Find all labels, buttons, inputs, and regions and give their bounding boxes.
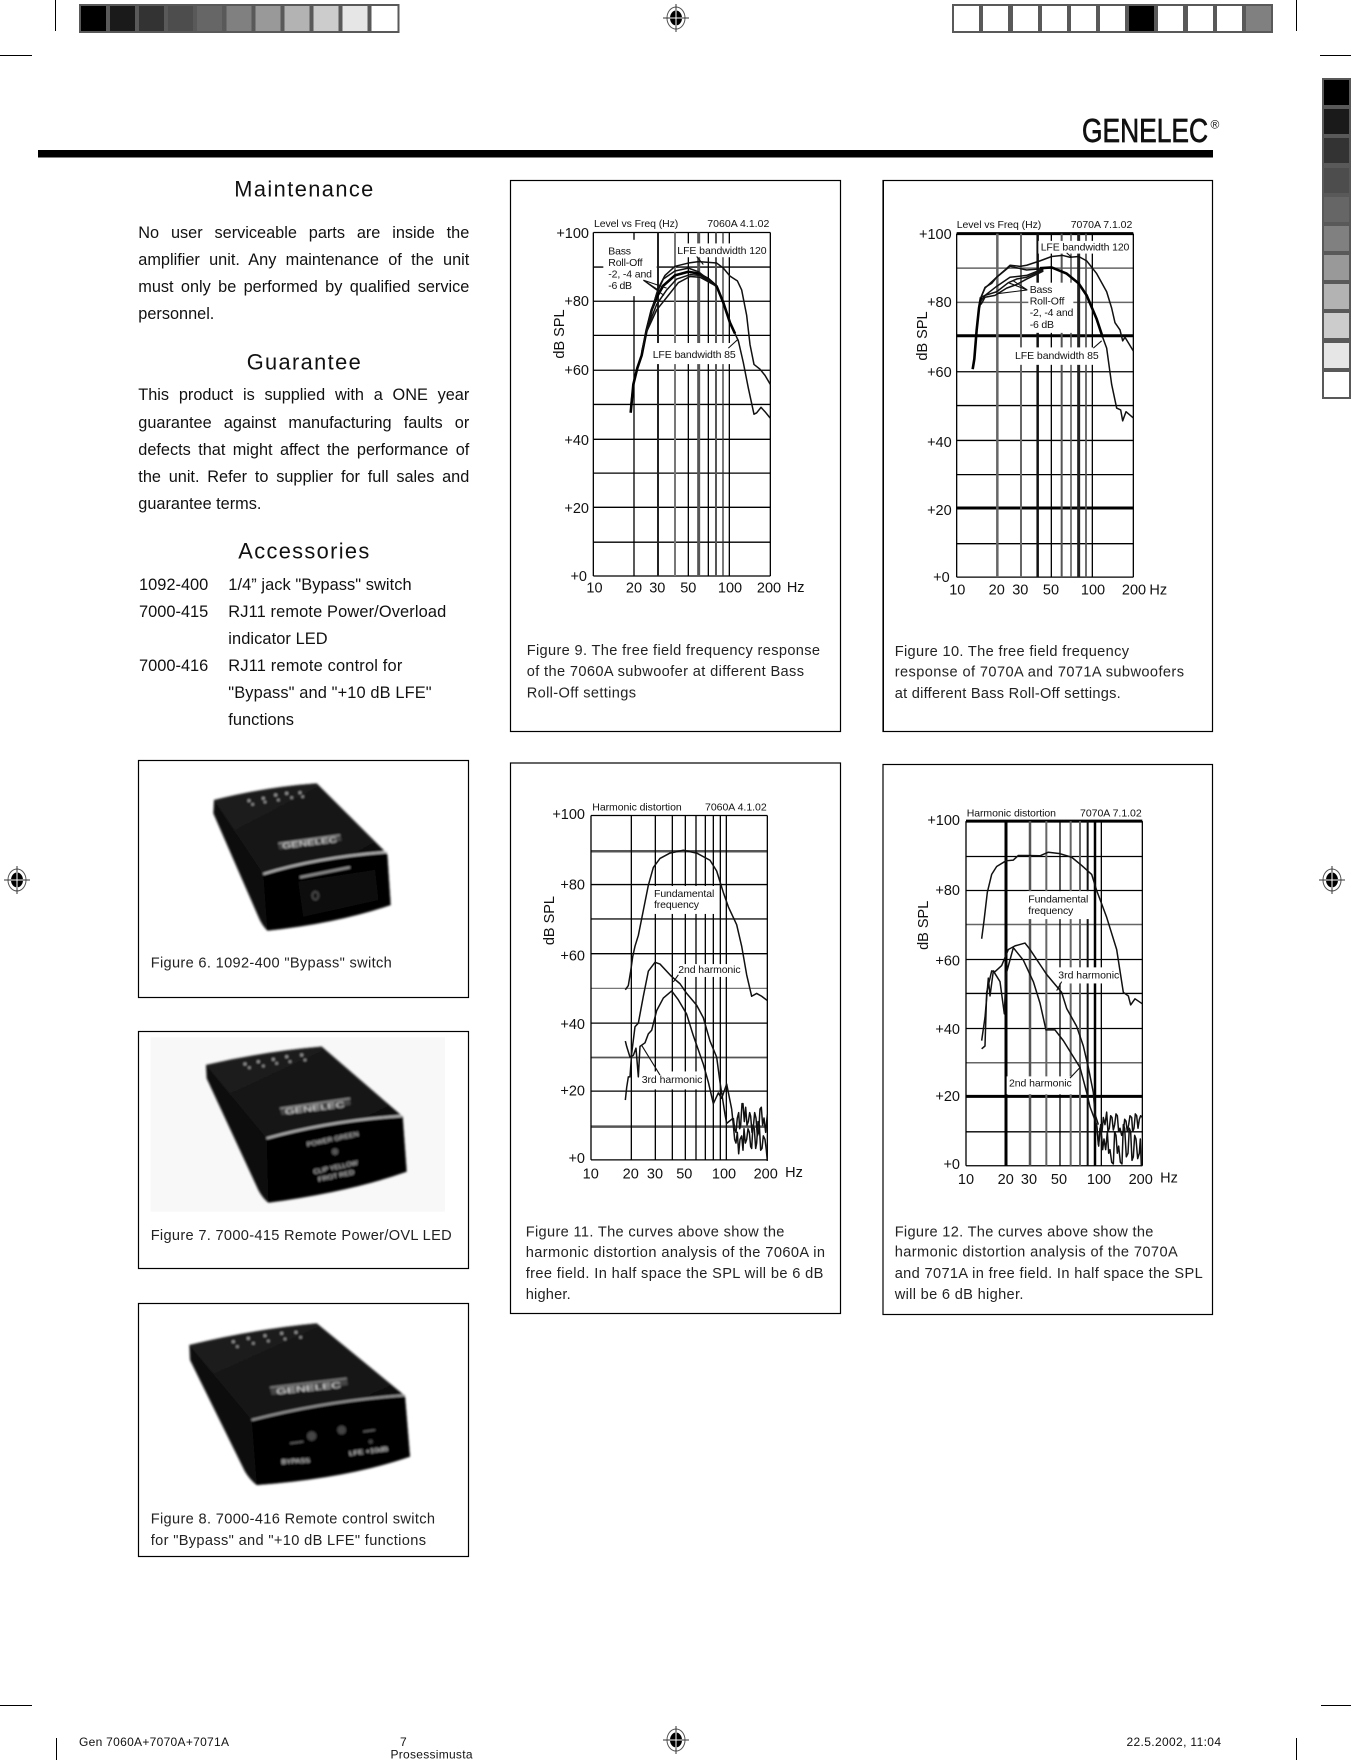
chart: 7070A level vs frequency: Roll-Off (1030, 296, 1064, 308)
chart: 7070A level vs frequency: +20 (927, 503, 952, 519)
chart: 7060A level vs frequency: +20 (564, 501, 589, 517)
chart: 7060A harmonic distortion: 200 (754, 1167, 778, 1183)
chart: 7060A level vs frequency: 100 (718, 581, 742, 597)
chart: 7060A level vs frequency: dB SPL (552, 309, 568, 359)
chart: 7060A level vs frequency: 30 (649, 581, 665, 597)
colour bar: right side vertical grey scale (1322, 78, 1351, 399)
caption: figure 9: Figure 9. The free field frequency response (527, 643, 820, 659)
chart: 7070A harmonic distortion: 200 (1129, 1172, 1153, 1188)
header rule (38, 150, 1213, 158)
chart: 7070A level vs frequency (915, 219, 1167, 598)
text block: maintenance paragraph: personnel. (138, 305, 214, 323)
chart: 7070A harmonic distortion: Harmonic distortion (967, 807, 1056, 819)
text block: guarantee paragraph: defects that might affect the performance of (138, 441, 469, 459)
text block: maintenance paragraph: No user serviceable parts are inside the (138, 224, 469, 242)
chart: 7060A level vs frequency: 10 (586, 581, 603, 597)
text block: maintenance paragraph (138, 224, 470, 323)
chart: 7070A harmonic distortion: 10 (958, 1172, 974, 1188)
chart: 7060A level vs frequency: 20 (626, 581, 642, 597)
chart: 7070A level vs frequency: LFE bandwidth 120 (1041, 242, 1130, 254)
chart: 7060A harmonic distortion: +60 (560, 948, 585, 964)
chart: 7060A level vs frequency: 200 (757, 581, 781, 597)
footer: print slug: 22.5.2002, 11:04 (1126, 1735, 1221, 1749)
logo: GENELEC: ® (1210, 118, 1220, 132)
colour bar: top right registration squares (952, 4, 1273, 33)
chart: 7060A level vs frequency: 7060A 4.1.02 (707, 218, 769, 230)
chart: 7070A harmonic distortion (916, 807, 1178, 1188)
chart: 7070A level vs frequency: Hz (1149, 582, 1167, 598)
icon: registration mark bottom (663, 1726, 689, 1754)
photo: bypass switch device (213, 783, 391, 931)
chart: 7070A level vs frequency: Level vs Freq (Hz) (957, 219, 1041, 231)
accessories list: functions (228, 711, 294, 729)
chart: 7060A level vs frequency: LFE bandwidth 120 (677, 245, 767, 257)
chart: 7060A harmonic distortion: 100 (712, 1167, 736, 1183)
chart: 7070A level vs frequency: 100 (1081, 582, 1105, 598)
chart: 7070A level vs frequency: dB SPL (915, 311, 931, 361)
accessories list: indicator LED (228, 630, 328, 648)
caption: figure 12 (894, 1225, 1203, 1303)
chart: 7060A harmonic distortion (542, 802, 803, 1183)
accessories list: "Bypass" and "+10 dB LFE" (228, 684, 432, 702)
chart: 7060A level vs frequency: +40 (564, 433, 589, 449)
chart: 7070A level vs frequency: 200 (1122, 582, 1146, 598)
chart: 7070A harmonic distortion: 30 (1021, 1172, 1037, 1188)
chart: 7060A harmonic distortion: Fundamental (654, 888, 714, 900)
chart: 7060A harmonic distortion: +100 (552, 807, 585, 823)
caption: figure 12: harmonic distortion analysis of the 7070A (895, 1244, 1178, 1260)
panel: figure 10 frequency response 7070A (882, 180, 1212, 732)
caption: figure 11 (526, 1225, 825, 1303)
chart: 7060A harmonic distortion: 30 (647, 1167, 663, 1183)
text block: maintenance paragraph: must only be performed by qualified service (138, 278, 469, 296)
chart: 7070A level vs frequency: 10 (949, 582, 965, 598)
chart: 7070A harmonic distortion: 7070A 7.1.02 (1080, 807, 1142, 819)
icon: registration mark left (4, 866, 30, 894)
chart: 7070A harmonic distortion: +80 (935, 883, 960, 899)
text block: guarantee paragraph: guarantee terms. (138, 495, 261, 513)
photo: remote control device (189, 1323, 410, 1485)
caption: figure 12: and 7071A in free field. In half space the SPL (895, 1266, 1203, 1282)
photo: remote control device: BYPASS (281, 1458, 310, 1466)
chart: 7060A harmonic distortion: +80 (560, 878, 585, 894)
chart: 7060A level vs frequency: LFE bandwidth 85 (653, 349, 736, 361)
chart: 7070A harmonic distortion: +0 (943, 1157, 960, 1173)
chart: 7070A harmonic distortion: +20 (935, 1089, 960, 1105)
logo: GENELEC: GENELEC (1082, 112, 1208, 149)
caption: figure 8: Figure 8. 7000-416 Remote control switch (151, 1511, 435, 1527)
panel: figure 12 harmonic distortion 7070A (883, 764, 1212, 1314)
chart: 7070A level vs frequency: -2, -4 and (1030, 307, 1074, 319)
chart: 7070A harmonic distortion: Hz (1160, 1170, 1178, 1186)
caption: figure 11: free field. In half space the SPL will be 6 dB (526, 1266, 823, 1282)
chart: 7060A harmonic distortion: Hz (785, 1165, 803, 1181)
caption: figure 9: Roll-Off settings (527, 686, 636, 702)
text block: guarantee paragraph: guarantee against manufacturing faults or (138, 414, 469, 432)
caption: figure 11: higher. (526, 1287, 571, 1303)
text block: guarantee paragraph: the unit. Refer to supplier for full sales and (138, 468, 469, 486)
chart: 7060A harmonic distortion: 50 (676, 1167, 692, 1183)
accessories list: 7000-415 (139, 603, 208, 621)
caption: figure 10: Figure 10. The free field frequency (895, 644, 1130, 660)
heading: Guarantee: Guarantee (247, 349, 361, 374)
caption: figure 7: Figure 7. 7000-415 Remote Power/OVL LED (151, 1228, 452, 1244)
caption: figure 12: will be 6 dB higher. (894, 1287, 1023, 1303)
chart: 7070A harmonic distortion: +60 (935, 954, 960, 970)
photo: remote LED device: FROT RED (318, 1169, 355, 1184)
caption: figure 8 (151, 1511, 435, 1549)
footer: print slug (79, 1735, 1221, 1760)
chart: 7070A level vs frequency: -6 dB (1030, 319, 1054, 331)
chart: 7060A harmonic distortion: +0 (568, 1151, 585, 1167)
chart: 7070A level vs frequency: +80 (927, 295, 952, 311)
footer: print slug: 7 (400, 1735, 407, 1749)
caption: figure 10: at different Bass Roll-Off settings. (895, 686, 1121, 702)
photo: bypass switch device: GENELEC (282, 835, 338, 851)
chart: 7060A harmonic distortion: +20 (560, 1084, 585, 1100)
chart: 7070A level vs frequency: 20 (989, 582, 1005, 598)
chart: 7070A level vs frequency: 30 (1012, 582, 1028, 598)
footer: print slug: Gen 7060A+7070A+7071A (79, 1735, 229, 1749)
accessories list: 1/4” jack "Bypass" switch (228, 576, 412, 594)
photo: remote LED device: GENELEC (284, 1100, 345, 1116)
chart: 7070A level vs frequency: Bass (1030, 284, 1052, 296)
heading: Maintenance: Maintenance (234, 177, 373, 202)
caption: figure 9: of the 7060A subwoofer at different Bass (527, 664, 804, 680)
caption: figure 9 (527, 643, 820, 702)
photo: remote LED device: CLIP YELLOW (313, 1160, 358, 1176)
chart: 7060A harmonic distortion: 20 (623, 1167, 639, 1183)
accessories list: 1092-400 (139, 576, 208, 594)
chart: 7060A level vs frequency: 50 (680, 581, 696, 597)
panel: figure 7 power overload LED (138, 1032, 468, 1268)
chart: 7060A harmonic distortion: +40 (560, 1017, 585, 1033)
caption: figure 12: Figure 12. The curves above show the (895, 1225, 1153, 1241)
chart: 7070A harmonic distortion: +100 (927, 813, 960, 829)
accessories list: 7000-416 (139, 657, 208, 675)
chart: 7060A level vs frequency: +0 (570, 569, 587, 585)
photo: remote control device: GENELEC (276, 1380, 342, 1396)
accessories list: RJ11 remote Power/Overload (228, 603, 446, 621)
chart: 7070A harmonic distortion: frequency (1028, 905, 1074, 917)
caption: figure 10 (895, 644, 1184, 702)
chart: 7060A harmonic distortion: Harmonic distortion (592, 802, 682, 814)
chart: 7060A harmonic distortion: 2nd harmonic (678, 964, 741, 976)
chart: 7070A level vs frequency: 7070A 7.1.02 (1071, 219, 1132, 231)
accessories list: RJ11 remote control for (228, 657, 403, 675)
caption: figure 8: for "Bypass" and "+10 dB LFE" functions (151, 1533, 426, 1549)
chart: 7060A harmonic distortion: dB SPL (542, 896, 558, 945)
panel: figure 11 harmonic distortion 7060A (510, 763, 840, 1314)
chart: 7060A level vs frequency: +80 (564, 294, 589, 310)
photo: remote LED device (151, 1037, 445, 1212)
chart: 7060A harmonic distortion: frequency (654, 899, 700, 911)
caption: figure 11: Figure 11. The curves above show the (526, 1225, 784, 1241)
chart: 7060A level vs frequency: Bass (608, 246, 631, 258)
chart: 7070A level vs frequency: +100 (919, 227, 952, 243)
chart: 7060A harmonic distortion: 3rd harmonic (642, 1074, 702, 1086)
panel: figure 6 bypass switch (138, 760, 468, 998)
photo: remote control device: LFE +10dB (349, 1446, 389, 1458)
chart: 7070A harmonic distortion: 2nd harmonic (1009, 1078, 1072, 1090)
chart: 7060A level vs frequency: -2, -4 and (608, 269, 652, 281)
chart: 7070A level vs frequency: +60 (927, 365, 952, 381)
colour bar: top left grey scale (79, 4, 400, 33)
chart: 7060A level vs frequency: -6 dB (608, 280, 632, 292)
chart: 7070A harmonic distortion: +40 (935, 1022, 960, 1038)
caption: figure 11: harmonic distortion analysis of the 7060A in (526, 1245, 825, 1261)
chart: 7060A level vs frequency: +100 (556, 226, 589, 242)
caption: figure 6: Figure 6. 1092-400 "Bypass" switch (151, 955, 392, 971)
icon: registration mark right (1319, 866, 1345, 894)
chart: 7070A harmonic distortion: dB SPL (916, 901, 932, 950)
chart: 7070A harmonic distortion: 20 (998, 1172, 1014, 1188)
chart: 7060A harmonic distortion: 7060A 4.1.02 (705, 802, 767, 814)
chart: 7070A level vs frequency: LFE bandwidth 85 (1015, 350, 1099, 362)
chart: 7060A level vs frequency: Roll-Off (608, 257, 643, 269)
icon: registration mark top (663, 4, 689, 32)
chart: 7060A harmonic distortion: 10 (583, 1167, 599, 1183)
panel: figure 8 remote control switch (138, 1304, 468, 1556)
photo: remote LED device: POWER GREEN (306, 1131, 360, 1149)
heading: Accessories: Accessories (238, 538, 369, 563)
text block: guarantee paragraph: This product is supplied with a ONE year (138, 386, 469, 404)
panel: figure 9 frequency response 7060A (510, 180, 840, 732)
chart: 7070A level vs frequency: +0 (933, 570, 950, 586)
chart: 7060A level vs frequency: +60 (564, 363, 589, 379)
chart: 7070A harmonic distortion: 3rd harmonic (1058, 970, 1119, 982)
chart: 7060A level vs frequency: Hz (787, 580, 805, 596)
chart: 7070A level vs frequency: +40 (927, 435, 952, 451)
chart: 7070A harmonic distortion: Fundamental (1028, 893, 1088, 905)
chart: 7060A level vs frequency: Level vs Freq (Hz) (594, 218, 678, 230)
chart: 7070A level vs frequency: 50 (1043, 582, 1059, 598)
accessories list (139, 576, 446, 729)
text block: guarantee paragraph (138, 386, 470, 513)
chart: 7060A level vs frequency (552, 218, 805, 597)
chart: 7070A harmonic distortion: 100 (1087, 1172, 1111, 1188)
caption: figure 10: response of 7070A and 7071A subwoofers (895, 665, 1184, 681)
text block: maintenance paragraph: amplifier unit. Any maintenance of the unit (138, 251, 469, 269)
chart: 7070A harmonic distortion: 50 (1051, 1172, 1067, 1188)
